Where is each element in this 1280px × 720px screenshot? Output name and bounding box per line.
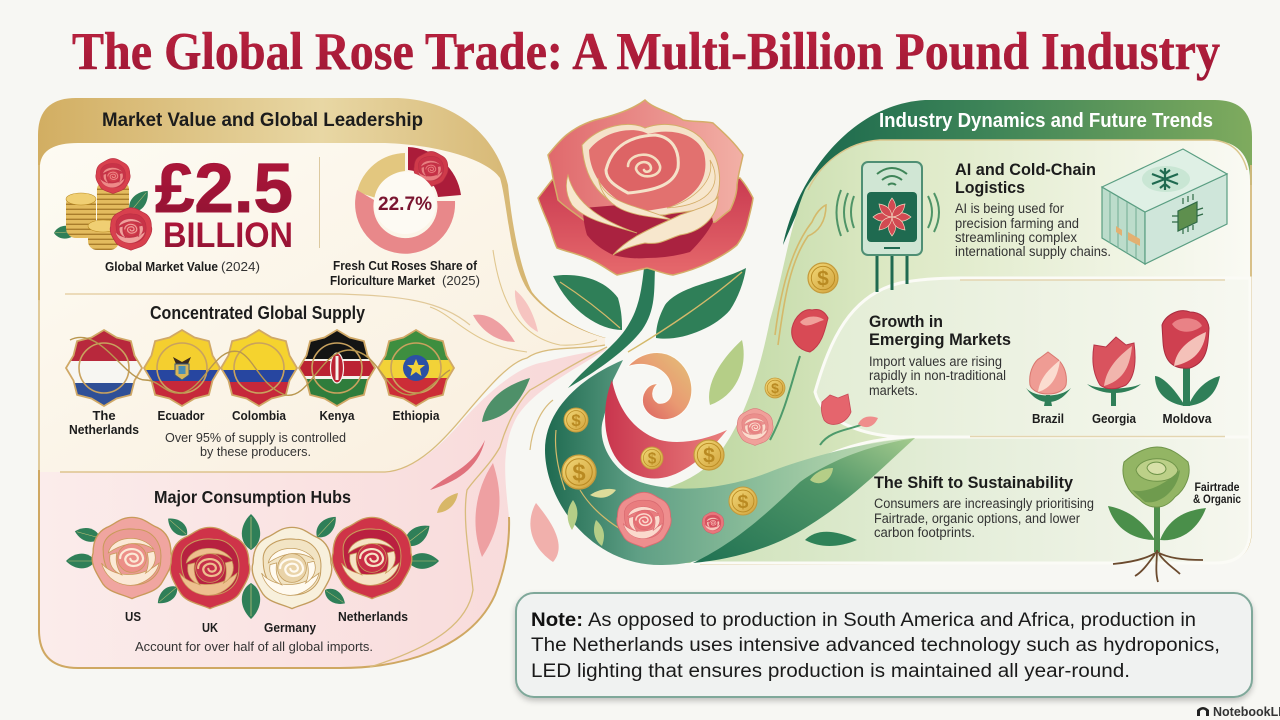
text: the shift to sustainability: carbon footprints. — [874, 525, 975, 540]
icon: green rose with roots — [1108, 447, 1206, 582]
panel body: cream section — [40, 143, 605, 472]
flag labels: Colombia — [232, 408, 287, 423]
icons: coins on swirl: $ — [571, 411, 581, 430]
callout: note: LED lighting that ensures production is maintained all year-round. — [531, 661, 1130, 682]
panel outline — [39, 470, 509, 668]
icon: refrigerated container — [1102, 149, 1227, 264]
flag: Ecuador — [142, 328, 222, 408]
swirl: bottom leaf tail — [693, 438, 915, 563]
callout: note — [516, 593, 1252, 697]
icon: AI device — [836, 162, 939, 292]
hub labels — [125, 609, 408, 635]
text: AI and cold-chain logistics: international supply chains. — [955, 244, 1111, 259]
flag: Kenya — [297, 328, 377, 408]
donut chart: 22.7 percent — [355, 147, 461, 254]
label: fairtrade and organic: Fairtrade — [1194, 482, 1240, 494]
hub labels: Netherlands — [338, 609, 408, 624]
panel heading: industry dynamics: Industry Dynamics and Future Trends — [879, 110, 1213, 132]
donut label: Fresh Cut Roses Share of — [333, 259, 478, 273]
icons: coins on swirl: $ — [738, 491, 749, 513]
supply note — [165, 430, 346, 459]
text: growth in emerging markets: Emerging Markets — [869, 330, 1011, 349]
stat label: global market value: (2024) — [221, 260, 260, 274]
decorative petals and wisps — [430, 290, 559, 562]
text: the shift to sustainability: The Shift to Sustainability — [874, 473, 1074, 492]
hub labels: Germany — [264, 620, 317, 635]
text: AI and cold-chain logistics: precision farming and — [955, 216, 1079, 231]
swirl: side leaf — [709, 340, 744, 405]
heading: major consumption hubs: Major Consumption Hubs — [154, 487, 351, 507]
supply note: Over 95% of supply is controlled — [165, 430, 346, 445]
cream petal ring — [582, 124, 720, 215]
stat label: global market value: Global Market Value — [105, 260, 218, 274]
flag: Ethiopia — [376, 328, 456, 408]
text: AI and cold-chain logistics: streamlining complex — [955, 230, 1077, 245]
text: growth in emerging markets: rapidly in non-traditional — [869, 368, 1006, 383]
hubs note: Account for over half of all global imports. — [135, 639, 373, 654]
inner bud — [606, 135, 678, 193]
panel: industry dynamics and future trends — [660, 100, 1252, 564]
callout: note: As opposed to production in South America and Africa, production in — [588, 610, 1196, 631]
flag labels: Ethiopia — [392, 408, 440, 423]
icons: small roses and buds on swirl — [617, 205, 878, 548]
swirl: leaves and vines on the band — [555, 430, 640, 546]
rose: UK — [170, 527, 250, 609]
flag labels: Kenya — [320, 408, 355, 423]
rose: US — [92, 517, 172, 599]
labels: emerging markets — [1032, 412, 1213, 426]
labels: emerging markets: Brazil — [1032, 412, 1064, 426]
rose: Netherlands — [332, 517, 412, 599]
flag labels — [69, 408, 440, 437]
main rose — [538, 100, 753, 388]
section background: shift to sustainability — [693, 437, 1250, 563]
icon: Moldova rose — [1155, 311, 1220, 406]
text: growth in emerging markets: markets. — [869, 383, 918, 398]
text: the shift to sustainability — [874, 473, 1094, 540]
swirl: spiral centre — [627, 352, 692, 420]
leaves behind hub roses — [66, 512, 439, 619]
text: AI and cold-chain logistics — [955, 160, 1111, 259]
text: growth in emerging markets: Growth in — [869, 312, 943, 331]
panel base — [660, 140, 1250, 563]
flag: Netherlands — [64, 328, 144, 408]
text: AI and cold-chain logistics: Logistics — [955, 178, 1025, 197]
donut chart: 22.7 percent: 22.7% — [378, 194, 432, 215]
callout: note: Note: — [531, 610, 583, 631]
flag labels: Netherlands — [69, 422, 139, 437]
icon: Georgia rose — [1087, 337, 1141, 406]
heading: Market Value and Global Leadership — [102, 110, 423, 131]
dark cup — [583, 198, 713, 258]
icons: coins on swirl: $ — [817, 268, 829, 291]
icon: coins and roses — [54, 158, 153, 250]
callout: note: The Netherlands uses intensive advanced technology such as hydroponics, — [531, 635, 1220, 656]
stat: 2.5 billion: £2.5 — [155, 149, 293, 227]
text: the shift to sustainability: Fairtrade, organic options, and lower — [874, 511, 1080, 526]
text: the shift to sustainability: Consumers are increasingly prioritising — [874, 496, 1094, 511]
icons: coins on swirl: $ — [572, 460, 586, 486]
stat: 2.5 billion: BILLION — [163, 216, 293, 255]
rose: Germany — [252, 527, 332, 609]
swirl: red ribbon — [605, 380, 727, 479]
panel background: gold header band — [38, 98, 606, 340]
labels: emerging markets: Georgia — [1092, 412, 1137, 426]
donut label: Floriculture Market — [330, 274, 436, 288]
flag labels: The — [92, 408, 116, 423]
outline — [700, 165, 1251, 564]
icons: coins on swirl: $ — [771, 380, 779, 396]
text: AI and cold-chain logistics: AI is being used for — [955, 201, 1064, 216]
donut label: (2025) — [442, 274, 480, 288]
upper pink petals — [548, 100, 743, 225]
right leaf — [656, 268, 746, 339]
panel body: pink section — [39, 349, 607, 668]
swirl: green band — [545, 360, 915, 565]
stem — [568, 268, 655, 388]
flag: Colombia — [219, 328, 299, 408]
heading: concentrated global supply: Concentrated Global Supply — [150, 303, 365, 323]
header band — [783, 100, 1252, 245]
inner pink petal — [589, 130, 705, 212]
icon: Brazil rose — [1026, 352, 1071, 406]
section background: growth in emerging markets — [815, 278, 1250, 437]
text: growth in emerging markets — [869, 312, 1011, 398]
icons: coins on swirl: $ — [703, 444, 715, 468]
label: fairtrade and organic — [1193, 482, 1242, 506]
donut label — [330, 259, 480, 288]
cream swooshes — [566, 175, 637, 233]
text: growth in emerging markets: Import values are rising — [869, 354, 1002, 369]
labels: emerging markets: Moldova — [1162, 412, 1213, 426]
supply note: by these producers. — [200, 444, 311, 459]
hub labels: UK — [202, 620, 219, 635]
text: AI and cold-chain logistics: AI and Cold-Chain — [955, 160, 1096, 179]
lower red petals — [538, 178, 753, 275]
flag labels: Ecuador — [158, 408, 204, 423]
hub labels: US — [125, 609, 141, 624]
panel: market value and global leadership — [38, 98, 607, 668]
label: fairtrade and organic: & Organic — [1193, 494, 1242, 506]
icons: coins on swirl: $ — [648, 451, 657, 468]
left leaf — [553, 275, 622, 330]
icons: coins on swirl — [562, 263, 838, 515]
